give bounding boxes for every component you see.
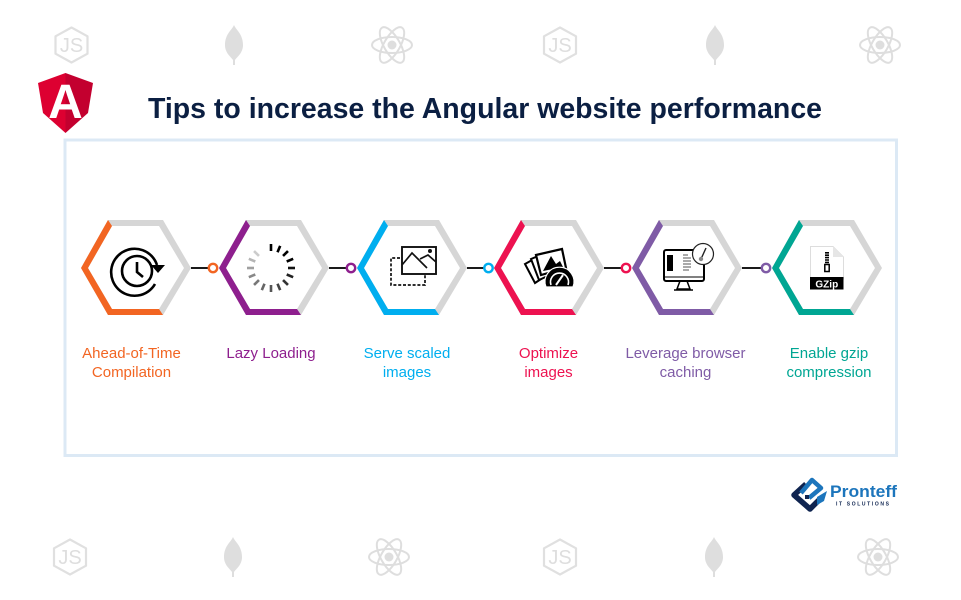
connector node: pink bbox=[622, 264, 630, 272]
icon: GZip file: GZip bbox=[815, 280, 838, 290]
title: Tips to increase the Angular website performance bbox=[148, 93, 822, 125]
connector node: violet bbox=[762, 264, 770, 272]
icon: Angular logo bbox=[38, 73, 93, 133]
background pattern: bottom row: JS bbox=[548, 547, 572, 569]
hexagon: Lazy Loading bbox=[219, 220, 329, 315]
icon: scaled image frames bbox=[391, 247, 436, 285]
hexagon: Leverage browser caching bbox=[632, 220, 742, 315]
logo: Pronteff IT Solutions: Pronteff bbox=[830, 483, 898, 501]
label: Enable gzip compression: Enable gzip bbox=[790, 345, 868, 362]
label: Leverage browser caching: caching bbox=[660, 364, 711, 381]
icon: photos with speed gauge bbox=[525, 249, 574, 287]
background pattern: top row: JS bbox=[60, 35, 83, 57]
label: Optimize images: images bbox=[524, 364, 573, 381]
connector node: orange bbox=[209, 264, 217, 272]
logo: Pronteff IT Solutions bbox=[794, 480, 898, 509]
panel: tips container bbox=[65, 140, 896, 456]
label: Serve scaled images: Serve scaled bbox=[364, 345, 450, 362]
connector lines bbox=[191, 267, 761, 269]
label: Lazy Loading: Lazy Loading bbox=[226, 345, 316, 362]
background pattern: bottom row: JS bbox=[58, 547, 82, 569]
label: Enable gzip compression: compression bbox=[786, 364, 872, 381]
label: Ahead-of-Time Compilation: Ahead-of-Time bbox=[82, 345, 181, 362]
icon: loading spinner bbox=[247, 244, 295, 292]
icon: Angular logo: A bbox=[48, 76, 83, 129]
connector node: blue bbox=[484, 264, 493, 272]
hexagon: Optimize images bbox=[494, 220, 604, 315]
label: Optimize images: Optimize bbox=[519, 345, 578, 362]
label: Serve scaled images: images bbox=[383, 364, 431, 381]
hexagon: Ahead-of-Time bbox=[81, 220, 191, 315]
label: Ahead-of-Time Compilation: Compilation bbox=[92, 364, 171, 381]
background pattern: bottom row bbox=[54, 536, 898, 578]
background pattern: top row bbox=[56, 24, 900, 66]
icon: clock with circular arrow bbox=[111, 249, 165, 296]
background pattern: top row: JS bbox=[548, 35, 572, 57]
icon: GZip file bbox=[810, 246, 844, 290]
hexagon: Serve scaled images bbox=[357, 220, 467, 315]
logo: Pronteff IT Solutions: IT SOLUTIONS bbox=[836, 502, 890, 508]
icon: monitor with gauge bbox=[664, 244, 714, 290]
label: Leverage browser caching: Leverage browser bbox=[625, 345, 746, 362]
connector node: purple bbox=[347, 264, 355, 272]
hexagon: Enable gzip compression bbox=[772, 220, 882, 315]
